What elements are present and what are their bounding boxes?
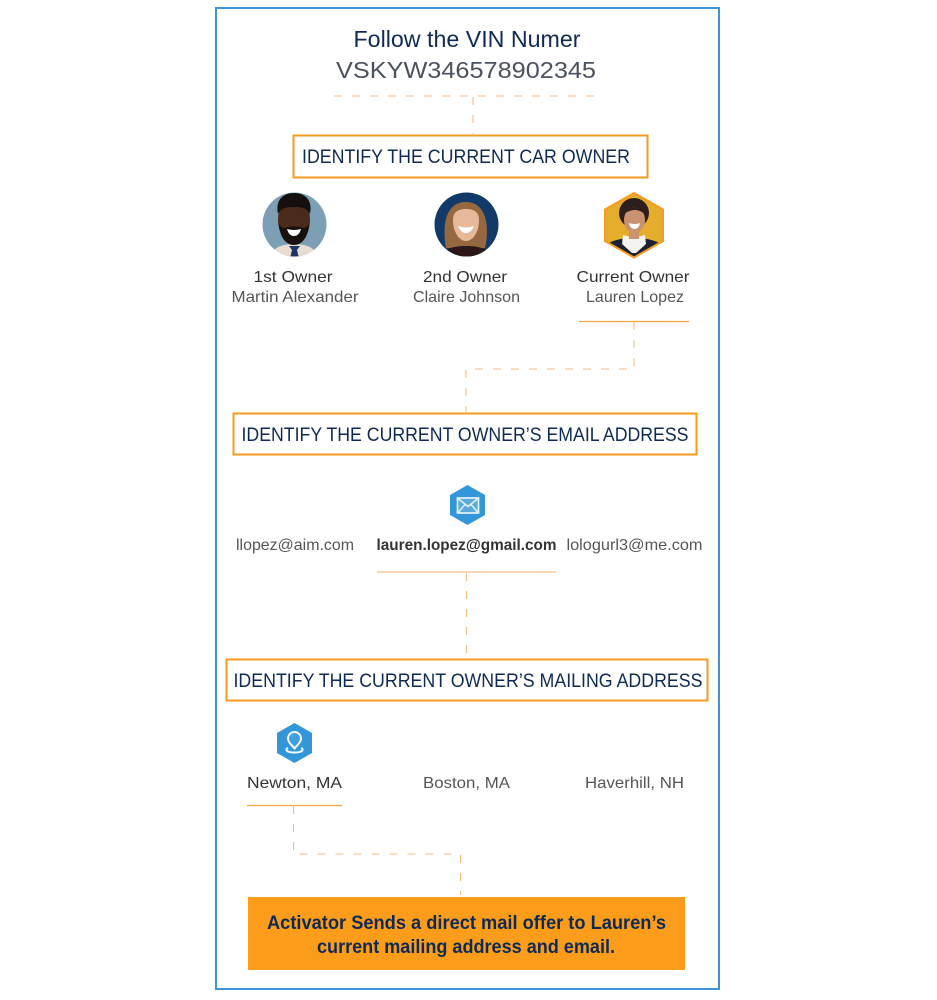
owner: current owner: Lauren Lopez [586,289,684,306]
connector: VIN to step 1 [334,96,600,134]
email options: llopez@aim.com [236,537,354,554]
icon: envelope [450,485,485,525]
owner: 1st owner: Martin Alexander [232,289,359,306]
VIN number: VSKYW346578902345 [336,57,596,83]
address options [247,775,684,806]
step 2 heading: IDENTIFY THE CURRENT OWNER’S EMAIL ADDRESS [242,425,688,446]
email options: lologurl3@me.com [566,537,702,554]
label: 2nd owner: 2nd Owner [423,269,508,286]
email options [236,537,702,572]
connector: email to step 3 [466,573,468,658]
owner: 2nd owner: Claire Johnson [413,289,520,306]
outer frame [216,8,719,989]
step 1 heading [294,136,648,178]
owner: 1st owner [232,192,359,306]
address options: Haverhill, NH [585,775,684,792]
step 3 heading [226,660,708,700]
icon: location pin [277,723,312,763]
label: 1st owner: 1st Owner [254,269,333,286]
portrait: Lauren [604,192,664,259]
owner: 2nd owner [413,192,520,306]
step 1 heading: IDENTIFY THE CURRENT CAR OWNER [302,147,630,168]
email options: lauren.lopez@gmail.com [376,537,556,554]
label: current owner: Current Owner [576,269,690,286]
step 2 heading [234,414,696,454]
callout: Activator Sends a direct mail offer to Lauren’s [267,913,666,934]
owner: current owner [576,192,690,322]
address options: Newton, MA [247,775,342,792]
address options: Boston, MA [423,775,510,792]
connector: address to callout [294,806,460,895]
connector: owner to step 2 [466,322,634,412]
portrait: Claire [434,192,499,258]
callout: current mailing address and email. [317,937,615,958]
step 3 heading: IDENTIFY THE CURRENT OWNER’S MAILING ADDRESS [234,671,702,692]
callout [248,897,685,970]
title: Follow the VIN Numer [354,26,581,52]
portrait: Martin [262,192,327,258]
